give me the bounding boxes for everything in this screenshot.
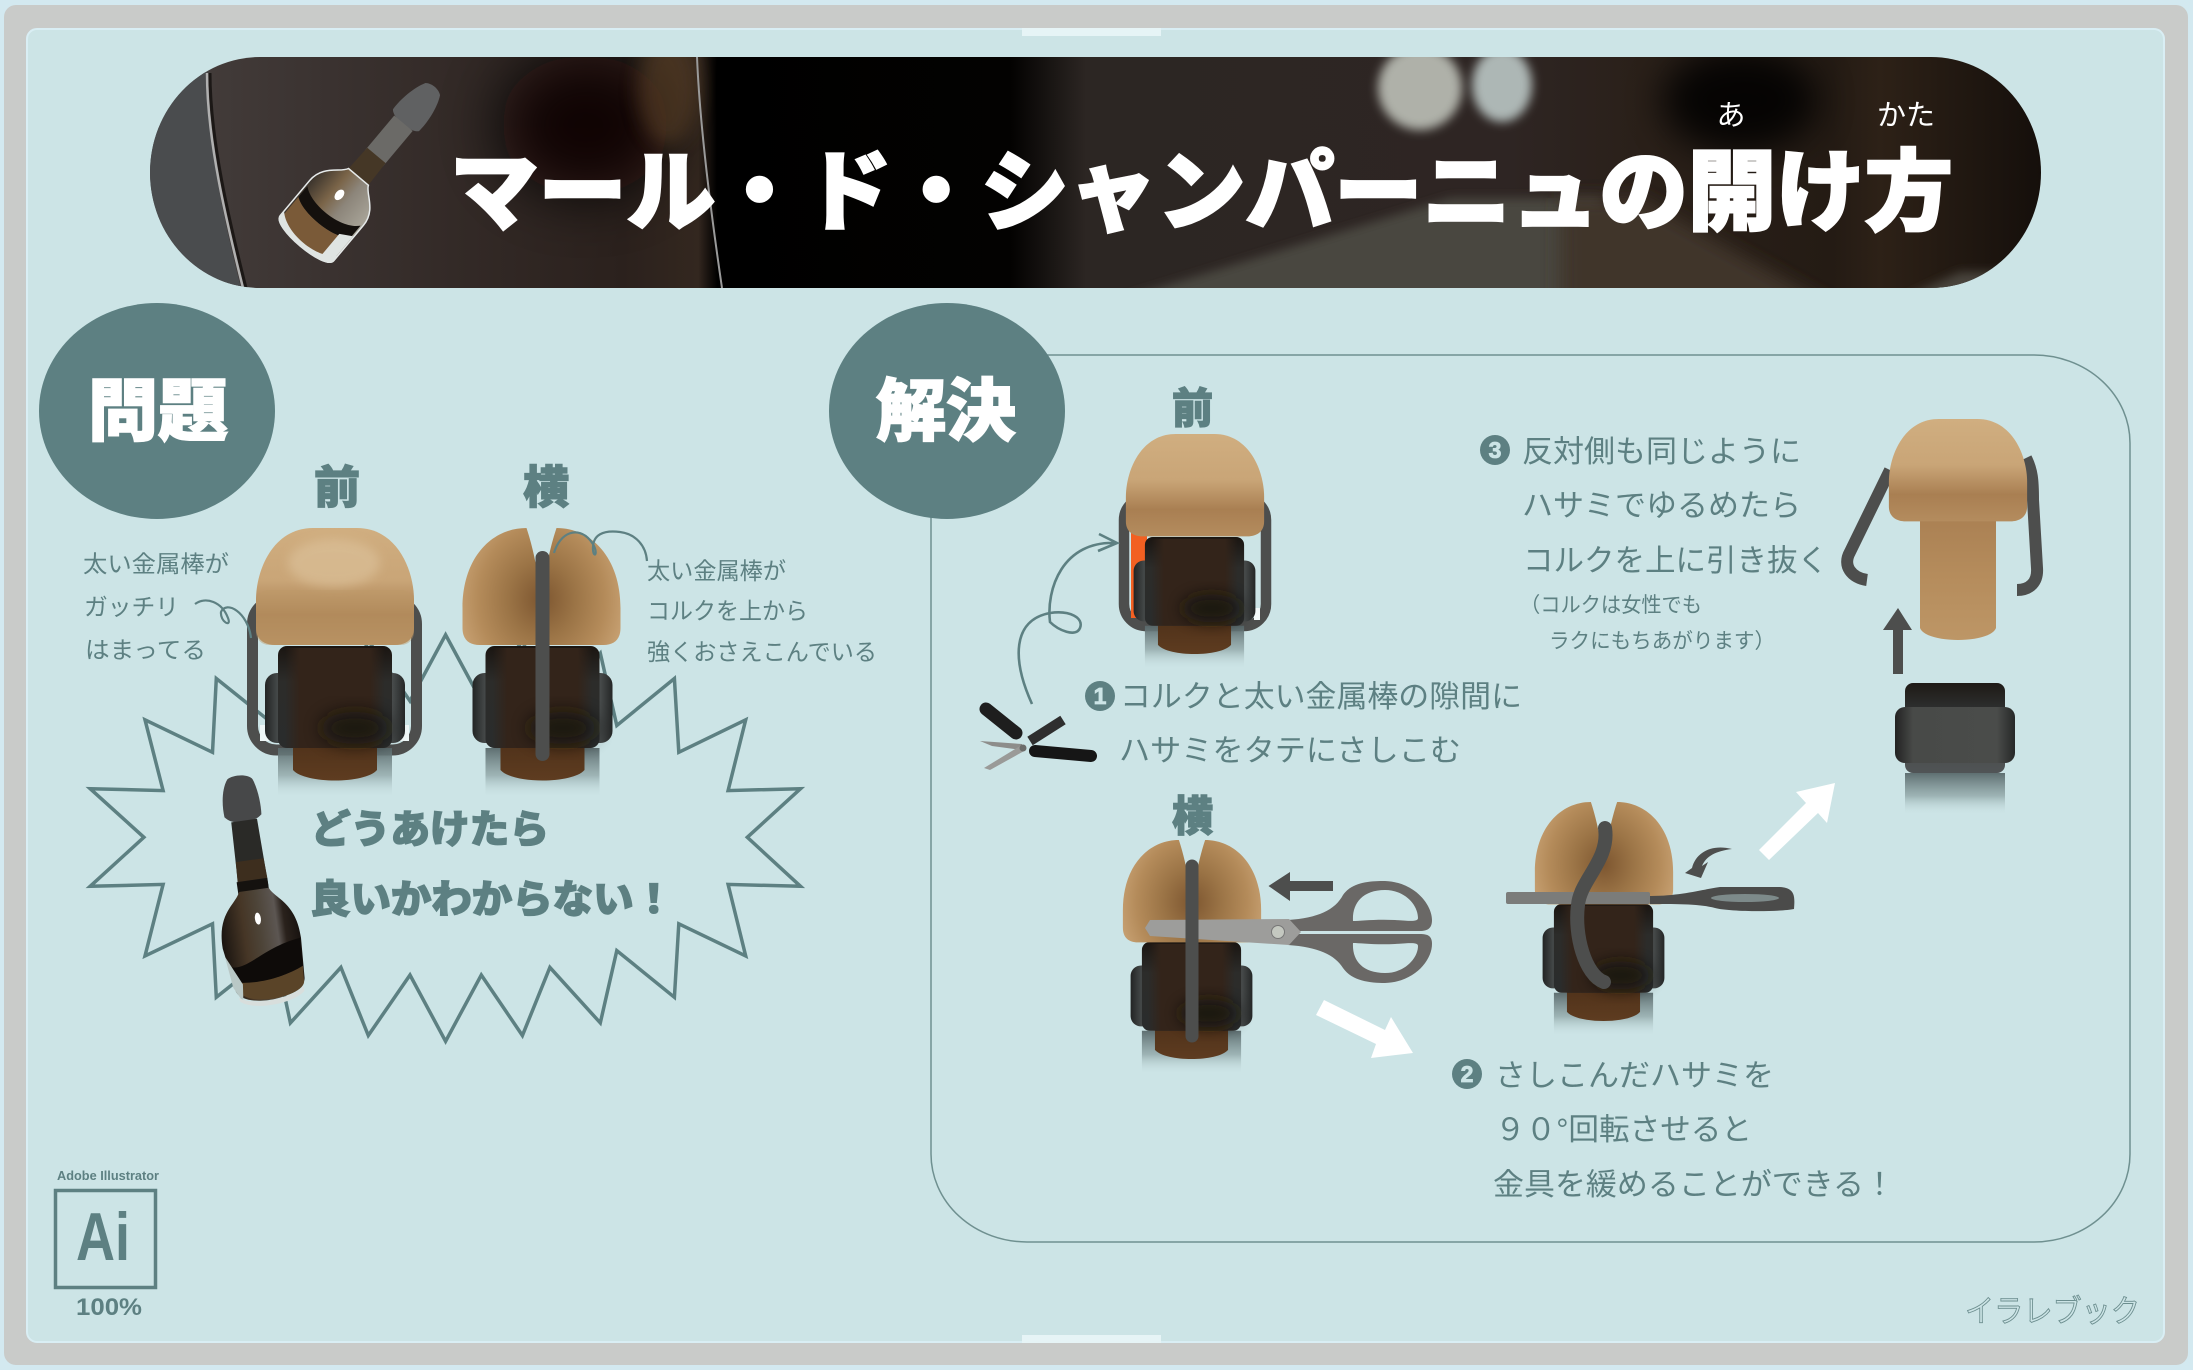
step 1 text: コルクと太い金属棒の隙間に <box>1120 680 1522 714</box>
title text: マール・ド・シャンパーニュの開け方 <box>450 143 1953 242</box>
icon: champagne bottle <box>199 770 310 1011</box>
callout: right note <box>647 558 877 665</box>
ruby: かた: かた <box>1877 100 1935 132</box>
arrow: scissors to gap <box>1019 534 1117 704</box>
step 2 text: さしこんだハサミを <box>1495 1059 1774 1093</box>
heading: problem: 問題 <box>88 374 228 450</box>
step 3 illustration: removed wire hood <box>1895 683 2015 815</box>
step 1 text <box>1119 680 1522 768</box>
step 1 number <box>1085 681 1115 711</box>
callout: right note: 強くおさえこんでいる <box>647 639 877 665</box>
illustration: closed cork side view <box>462 528 620 798</box>
callout: right note: 太い金属棒が <box>647 558 786 584</box>
callout: right note: コルクを上から <box>647 598 808 624</box>
step 1 number: 1 <box>1094 683 1107 709</box>
icon: bottle on banner <box>273 64 461 269</box>
step 2 text <box>1493 1059 1895 1202</box>
step 3 note: （コルクは女性でも <box>1520 594 1702 617</box>
arrow: pull up <box>1883 608 1912 674</box>
badge: Adobe Illustrator 100%: 100% <box>76 1294 142 1321</box>
scissors blades <box>1145 919 1301 945</box>
heading circle: problem <box>39 303 275 519</box>
frame: top tab <box>1022 28 1161 36</box>
burst message: 良いかわからない！ <box>310 879 674 922</box>
step 2 text: ９０°回転させると <box>1495 1113 1752 1147</box>
label: front: 前 <box>1172 385 1213 432</box>
step 1 text: ハサミをタテにさしこむ <box>1119 734 1461 768</box>
starburst outline <box>90 635 800 1041</box>
panel: solution <box>829 303 2130 1242</box>
solution rounded frame <box>931 355 2130 1242</box>
scissors handles <box>1288 881 1432 983</box>
arrow: rotate <box>1685 848 1732 878</box>
step 3 illustration: pulled cork <box>1847 419 2037 640</box>
callout: left note: はまってる <box>85 637 206 663</box>
illustration: closed cork front view <box>252 528 416 798</box>
arrow: white down-right <box>1316 1000 1413 1058</box>
callout: left note <box>83 551 229 663</box>
badge: Adobe Illustrator 100%: Adobe Illustrator <box>57 1168 159 1183</box>
arrow: push left <box>1268 872 1333 901</box>
badge: Adobe Illustrator 100% <box>56 1168 159 1321</box>
callout: left note: ガッチリ <box>84 594 179 620</box>
label: side: 横 <box>523 462 569 513</box>
badge: Adobe Illustrator 100%: Ai <box>76 1199 130 1275</box>
step 3 number <box>1480 435 1510 465</box>
burst message <box>310 809 674 922</box>
step 3 number: 3 <box>1489 437 1501 463</box>
step 3 note: ラクにもちあがります） <box>1549 630 1775 653</box>
icon: small scissors <box>980 709 1091 770</box>
burst message: どうあけたら <box>311 809 549 852</box>
label: side: 横 <box>1172 793 1213 840</box>
callout: left note: 太い金属棒が <box>83 551 229 577</box>
signature: イラレブック <box>1965 1294 2140 1329</box>
step 2 number: 2 <box>1461 1061 1473 1087</box>
label: front: 前 <box>314 462 360 513</box>
frame: bottom tab <box>1022 1335 1161 1343</box>
step 2 illustration: scissors inserted <box>1123 840 1432 1074</box>
step 2 number <box>1452 1059 1482 1089</box>
heading: solution: 解決 <box>876 374 1016 450</box>
heading circle: solution <box>829 303 1065 519</box>
curl: right callout line <box>554 532 647 561</box>
step 3 text: 反対側も同じように <box>1522 435 1801 469</box>
step 3 text: コルクを上に引き抜く <box>1523 544 1828 578</box>
step 1 illustration: cork front <box>1124 434 1266 669</box>
step 3 text: ハサミでゆるめたら <box>1522 489 1801 523</box>
step 2 text: 金具を緩めることができる！ <box>1493 1168 1895 1202</box>
step 3 text <box>1522 435 1828 578</box>
ruby: あ: あ <box>1716 100 1746 132</box>
arrow: white up-right <box>1759 783 1835 860</box>
title banner <box>150 57 2041 288</box>
curl: left callout line <box>195 600 251 638</box>
step 2 illustration: scissors rotated <box>1506 802 1794 1036</box>
panel: problem <box>39 303 877 1041</box>
step 3 note <box>1520 594 1775 653</box>
